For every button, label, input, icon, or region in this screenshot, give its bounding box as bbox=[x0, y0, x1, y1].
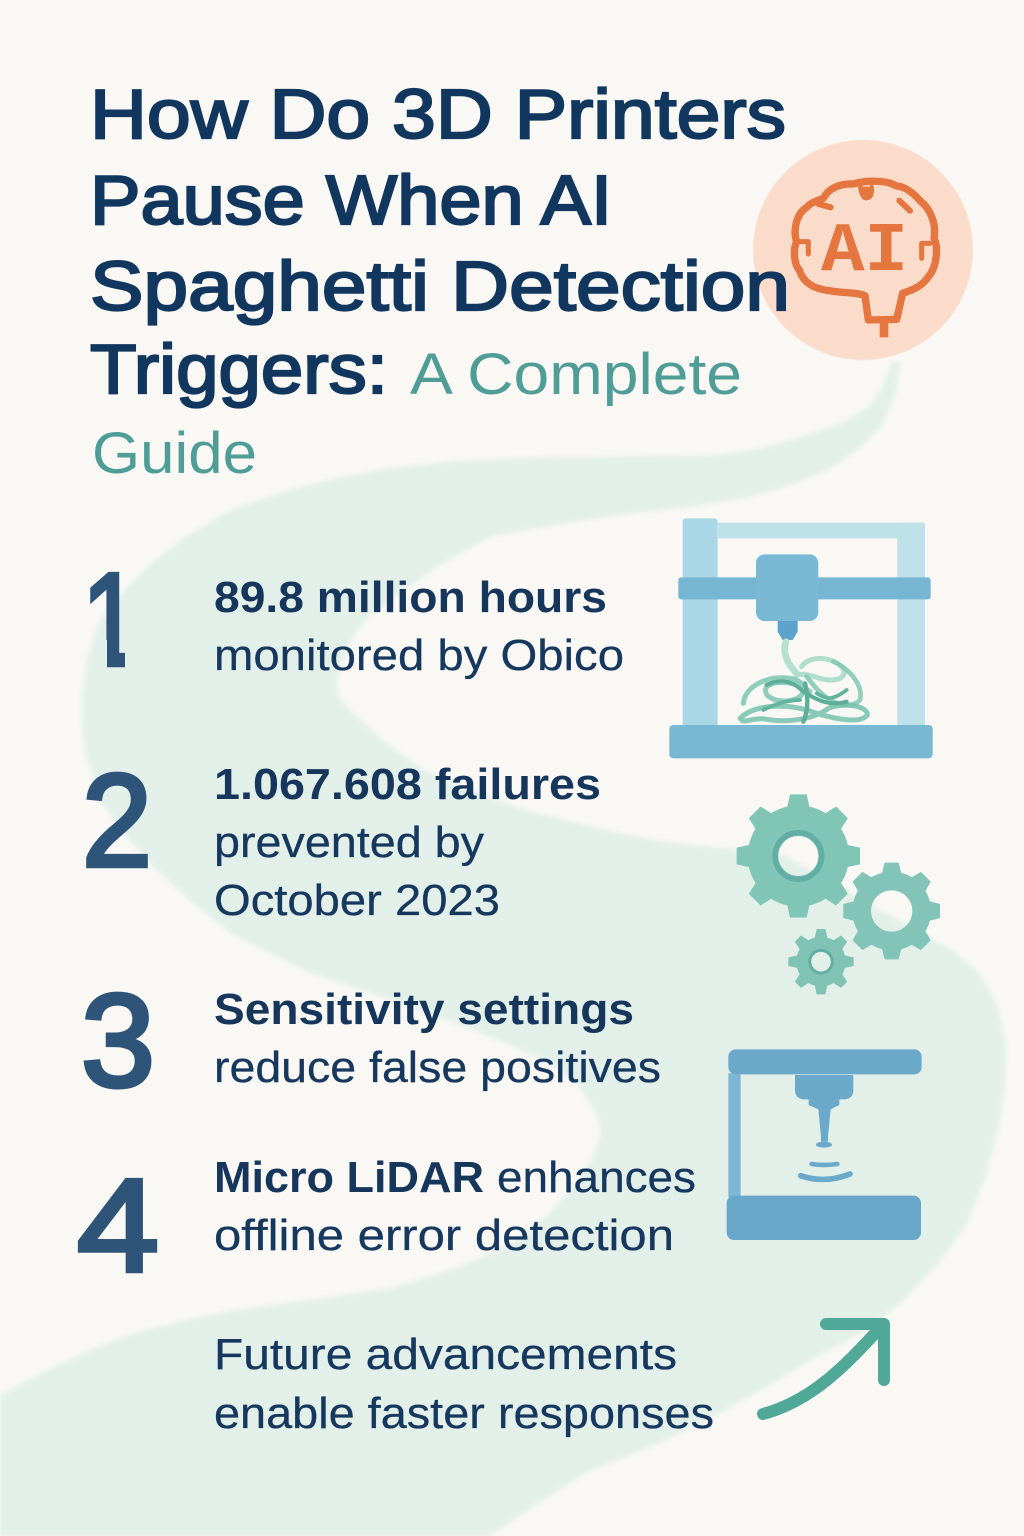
icon: AI brain badge bbox=[753, 140, 973, 360]
large gear bbox=[737, 794, 860, 918]
icon: micro LiDAR printer bbox=[727, 1049, 922, 1240]
medium gear bbox=[843, 863, 940, 959]
number 3: 3 bbox=[81, 967, 155, 1114]
subtitle bbox=[92, 342, 742, 486]
number 2: 2 bbox=[82, 747, 152, 894]
title: Spaghetti Detection bbox=[90, 247, 790, 325]
subtitle: Guide bbox=[92, 421, 257, 486]
icon: 3D printer with spaghetti bbox=[669, 518, 933, 758]
text block: stat 2 bbox=[214, 760, 601, 925]
subtitle: A Complete bbox=[410, 342, 742, 407]
number 1: 1 bbox=[82, 546, 140, 693]
title: Pause When AI bbox=[90, 161, 612, 239]
number 4: 4 bbox=[77, 1152, 159, 1299]
small gear bbox=[788, 929, 854, 994]
text block: stat 1 bbox=[214, 573, 624, 680]
text block: future advancements: Future advancements bbox=[214, 1330, 677, 1379]
text block: stat 2: prevented by bbox=[214, 818, 484, 867]
text block: stat 1: monitored by Obico bbox=[214, 631, 624, 680]
AI label: AI bbox=[821, 213, 908, 292]
title: Triggers: bbox=[90, 330, 388, 408]
text block: stat 2: October 2023 bbox=[214, 876, 500, 925]
text block: stat 3: Sensitivity settings bbox=[214, 985, 634, 1034]
text block: stat 3 bbox=[214, 985, 661, 1092]
text block: stat 4 bbox=[214, 1153, 696, 1260]
title: How Do 3D Printers bbox=[90, 75, 786, 153]
text block: stat 2: 1.067.608 failures bbox=[214, 760, 601, 809]
text block: stat 3: reduce false positives bbox=[214, 1043, 661, 1092]
text block: stat 4: enhances bbox=[497, 1153, 696, 1202]
text block: stat 4: Micro LiDAR bbox=[214, 1153, 484, 1202]
spaghetti tangle bbox=[740, 642, 867, 722]
brain outline bbox=[794, 181, 936, 337]
text block: future advancements: enable faster responses bbox=[214, 1389, 714, 1438]
text block: future advancements bbox=[214, 1330, 714, 1438]
text block: stat 1: 89.8 million hours bbox=[214, 573, 607, 622]
title bbox=[90, 75, 790, 486]
icon: gears bbox=[737, 794, 940, 994]
arrow: upward trend bbox=[763, 1324, 884, 1414]
winding ribbon path bbox=[0, 362, 1006, 1536]
text block: stat 4: offline error detection bbox=[214, 1211, 674, 1260]
